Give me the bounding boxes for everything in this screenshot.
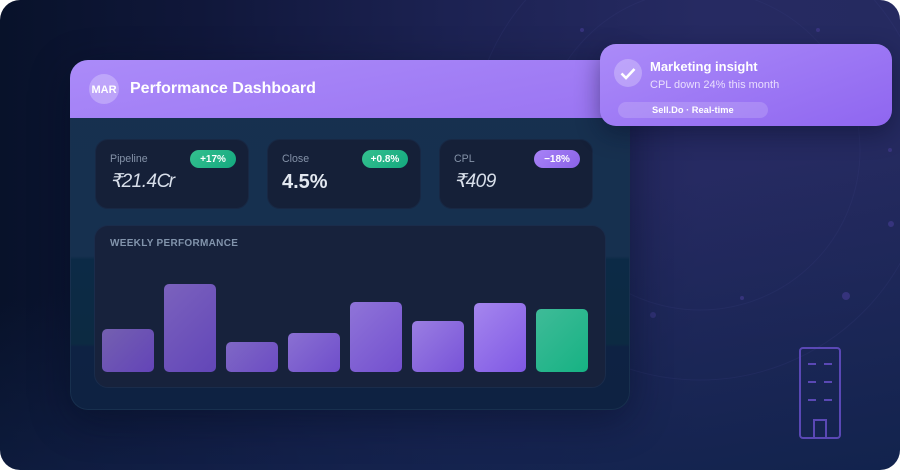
heading: Performance Dashboard xyxy=(130,80,316,97)
icon: building xyxy=(799,347,841,439)
panel: close KPI: Close xyxy=(282,153,309,165)
panel: close KPI: 4.5% xyxy=(282,171,328,193)
card border xyxy=(70,60,630,410)
panel: pipeline KPI: ₹21.4Cr xyxy=(110,171,173,192)
avatar: MAR xyxy=(91,84,117,96)
bar chart xyxy=(102,284,588,372)
icon: check xyxy=(614,59,642,87)
panel: dashboard card xyxy=(70,60,630,410)
panel: pipeline KPI xyxy=(95,139,249,209)
panel: close KPI: +0.8% xyxy=(371,154,399,165)
panel: CPL KPI xyxy=(439,139,593,209)
callout: marketing insight xyxy=(600,44,892,126)
source pill xyxy=(618,102,768,118)
card header xyxy=(70,60,630,118)
source pill: Sell.Do · Real-time xyxy=(652,105,734,115)
avatar xyxy=(89,74,119,104)
panel: CPL KPI: CPL xyxy=(454,153,475,165)
panel: pipeline KPI: +17% xyxy=(200,154,226,165)
panel: close KPI xyxy=(267,139,421,209)
panel: pipeline KPI: Pipeline xyxy=(110,153,148,165)
panel: CPL KPI: ₹409 xyxy=(454,171,496,192)
callout text: CPL down 24% this month xyxy=(650,79,779,91)
panel: CPL KPI: −18% xyxy=(544,154,570,165)
panel: weekly performance chart xyxy=(94,225,606,388)
chart title: WEEKLY PERFORMANCE xyxy=(110,238,238,249)
callout title: Marketing insight xyxy=(650,59,758,74)
